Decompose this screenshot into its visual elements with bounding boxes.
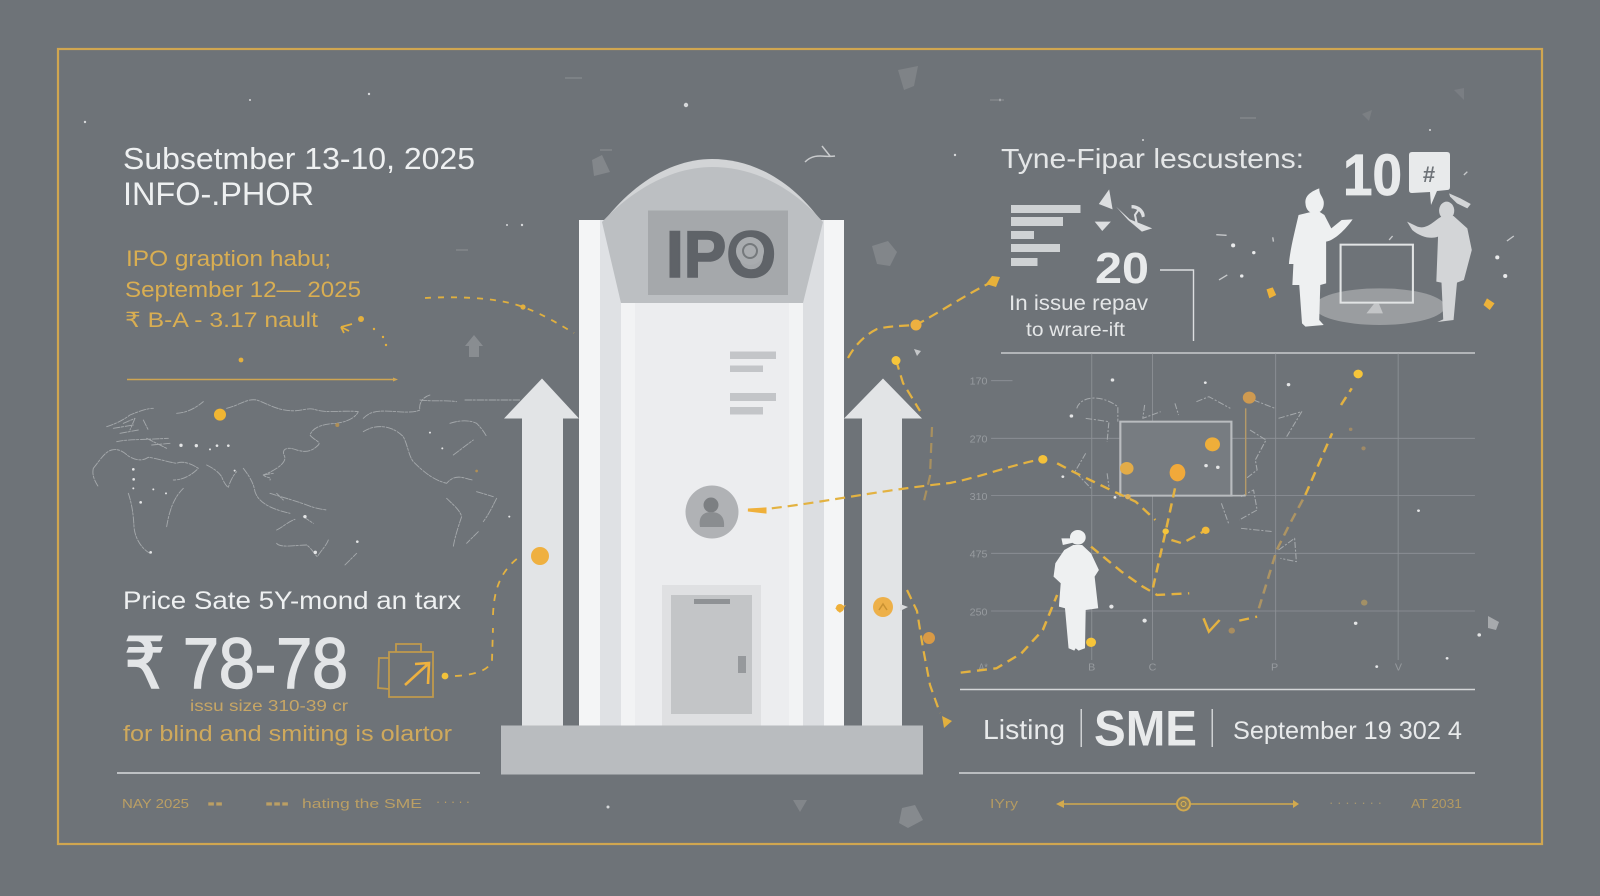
world map left [93, 395, 520, 565]
left person [1289, 188, 1353, 327]
dashed series [961, 388, 1352, 673]
building: IPO [579, 159, 844, 726]
grid [991, 353, 1475, 660]
illustration: two people and screen [1289, 188, 1472, 327]
price label: Price Sate 5Y-mond an tarx [123, 587, 462, 615]
footer text left: ▪▪ [207, 796, 223, 811]
line chart with map [961, 353, 1481, 674]
confetti around people [1216, 172, 1514, 310]
footer timeline: AT 2031 [1411, 796, 1462, 811]
divider left [117, 772, 480, 774]
footer timeline [990, 795, 1462, 811]
divider above listing [960, 688, 1475, 690]
axis labels: 170 [970, 377, 988, 388]
stat caption [1009, 292, 1149, 341]
right person [1407, 193, 1472, 322]
axis labels: 270 [970, 435, 988, 446]
text lines [730, 352, 776, 414]
stat: 10: 10 [1343, 143, 1402, 208]
footer text left [122, 794, 470, 811]
IPO sign: IPO [666, 217, 776, 291]
price value: ₹ 78-78 [124, 625, 348, 704]
axis labels: V [1395, 663, 1402, 674]
issue size note: issu size 310-39 cr [190, 698, 349, 715]
footer text left: · · · · · [436, 794, 470, 809]
axis labels: A* [979, 663, 988, 674]
stat: 20: 20 [1095, 244, 1149, 293]
left rising arrow [504, 378, 579, 726]
dashed curve to building [425, 297, 574, 333]
divider above chart [1001, 352, 1475, 354]
columns [579, 220, 844, 726]
gold text block: IPO dates: IPO graption habu; [126, 246, 331, 271]
chart markers [1038, 370, 1367, 647]
connectors from building to chart [756, 280, 1043, 713]
arrow coins [531, 547, 908, 617]
heading: date and subtitle: Subsetmber 13-10, 2025 [123, 141, 475, 176]
listing row: Listing [983, 714, 1065, 745]
footer timeline: IYry [990, 796, 1019, 811]
gold text block: IPO dates [125, 246, 361, 332]
listing row: SME [1094, 700, 1197, 756]
axis labels: B [1088, 663, 1095, 674]
axis labels [970, 377, 1402, 674]
chart specks [1061, 378, 1481, 668]
dome roof [602, 159, 823, 303]
small gold pointer with dots [239, 316, 387, 362]
connector dots [748, 276, 1000, 728]
stat caption: to wrare-ift [1026, 320, 1126, 341]
axis labels: 250 [970, 608, 988, 618]
gold caption: for blind and smiting is olartor [123, 721, 452, 746]
mini bar chart [1011, 205, 1080, 266]
axis labels: P [1271, 663, 1278, 674]
divider below listing [959, 772, 1475, 774]
listing row: September 19 302 4 [1233, 717, 1462, 745]
footer text left: NAY 2025 [122, 796, 189, 811]
map panel [1120, 422, 1231, 496]
footer text left: hating the SME [302, 796, 422, 811]
gold text block: IPO dates: ₹ B-A - 3.17 nault [125, 309, 318, 332]
screen [1341, 245, 1413, 313]
footer timeline: · · · · · · · [1329, 795, 1382, 810]
gold text block: IPO dates: September 12— 2025 [125, 277, 361, 302]
heading: date and subtitle: INFO-.PHOR [123, 176, 314, 212]
door [662, 585, 761, 726]
right rising arrow [844, 378, 922, 726]
axis labels: 310 [970, 492, 988, 503]
speech bubble: # [1423, 162, 1435, 187]
footer text left: ▪▪▪ [265, 796, 289, 811]
building base [501, 726, 923, 774]
heading: date and subtitle [123, 141, 475, 212]
dashed connector from briefcase to left arrow [442, 558, 518, 679]
stage ellipse [1314, 288, 1445, 325]
bracket line [1160, 270, 1194, 341]
axis labels: C [1149, 663, 1157, 674]
small grey arrow right [1488, 616, 1499, 630]
woman silhouette [1054, 530, 1099, 651]
axis labels: 475 [970, 550, 988, 560]
background shards and specks [84, 66, 1464, 828]
heading: right: Tyne-Fipar lescustens: [1001, 143, 1304, 174]
gold arrow rule [127, 378, 398, 382]
stat caption: In issue repav [1009, 292, 1149, 315]
world map faint [1075, 397, 1302, 562]
listing row [983, 700, 1462, 756]
speech bubble [1409, 152, 1450, 205]
icon: briefcase with arrow [378, 644, 433, 697]
icon: broken shards [1095, 189, 1152, 232]
person badge [686, 486, 738, 538]
